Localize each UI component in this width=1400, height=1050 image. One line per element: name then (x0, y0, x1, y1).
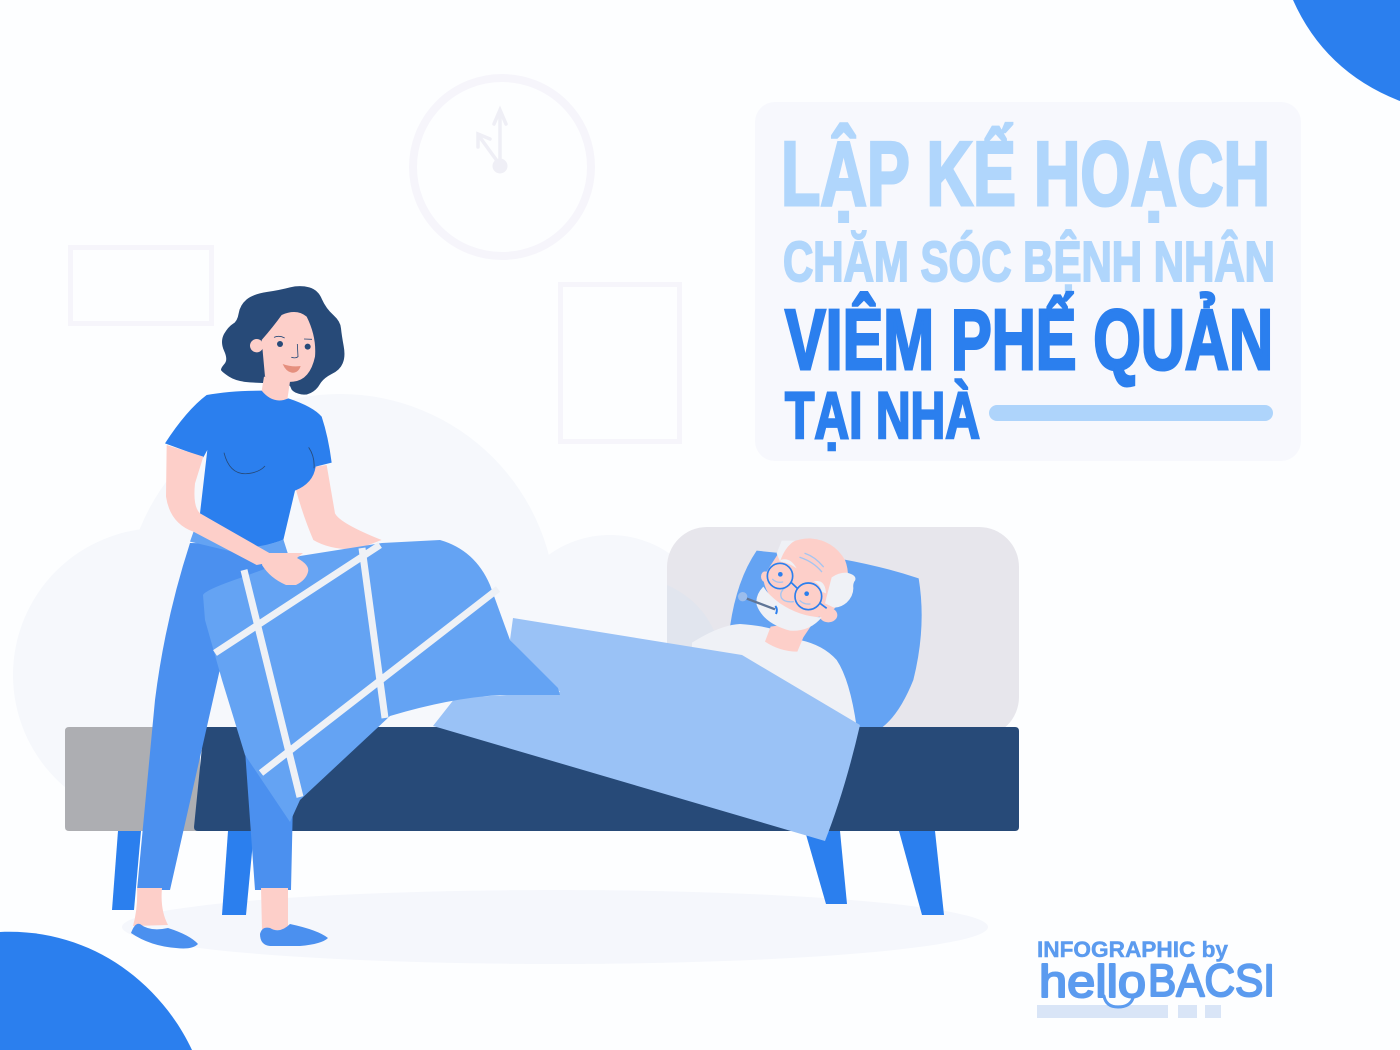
face (262, 312, 315, 382)
left ear (761, 571, 769, 582)
held blanket (203, 540, 560, 822)
wall frame: portrait (560, 284, 680, 442)
caregiver: left foot (260, 888, 328, 946)
headboard (667, 527, 1019, 737)
bed frame (65, 727, 1019, 831)
eyes (277, 341, 311, 350)
background cloud (13, 394, 715, 826)
title accent bar (989, 405, 1273, 421)
ear (250, 339, 263, 352)
eyebrows and nose (274, 336, 312, 358)
head (763, 538, 848, 618)
thermometer (738, 592, 777, 614)
glasses (767, 563, 827, 610)
hair (777, 541, 855, 607)
hair (221, 286, 344, 395)
bed legs (112, 831, 944, 915)
logo stethoscope (1104, 996, 1133, 1007)
title panel (755, 102, 1301, 461)
shirt creases (224, 447, 314, 474)
right arm (296, 465, 382, 549)
corner shape: bottom left (0, 932, 192, 1050)
wrinkles (773, 553, 823, 604)
blanket stripes (215, 545, 498, 797)
logo underline bars (1037, 1005, 1221, 1018)
patient: elderly man in bed (692, 538, 922, 727)
ear (819, 608, 837, 622)
caregiver: pants (137, 543, 293, 890)
neck (765, 620, 815, 652)
lower blanket over patient (433, 618, 860, 841)
logo wordmark: hello (1039, 956, 1146, 1007)
left arm (166, 445, 270, 565)
lips (283, 364, 301, 373)
corner shape: top right (1293, 0, 1400, 101)
title line 4: TẠI NHÀ (785, 378, 980, 452)
caregiver: right foot (131, 888, 198, 948)
logo wordmark: BACSI: BACSI (1148, 955, 1275, 1006)
pillow (730, 551, 922, 727)
wall frame: landscape (70, 248, 212, 324)
caregiver: hand (262, 553, 308, 585)
torso (692, 624, 857, 727)
waist highlight (190, 513, 288, 558)
logo caption: INFOGRAPHIC by (1037, 937, 1228, 962)
neck (261, 377, 290, 401)
logo: infographic by helloBACSI (1037, 937, 1275, 1018)
shirt (165, 391, 332, 547)
caregiver: upper body (165, 286, 382, 565)
wall clock (413, 78, 591, 256)
beard (756, 587, 822, 631)
floor shadow (122, 890, 988, 964)
pupils (778, 572, 809, 596)
